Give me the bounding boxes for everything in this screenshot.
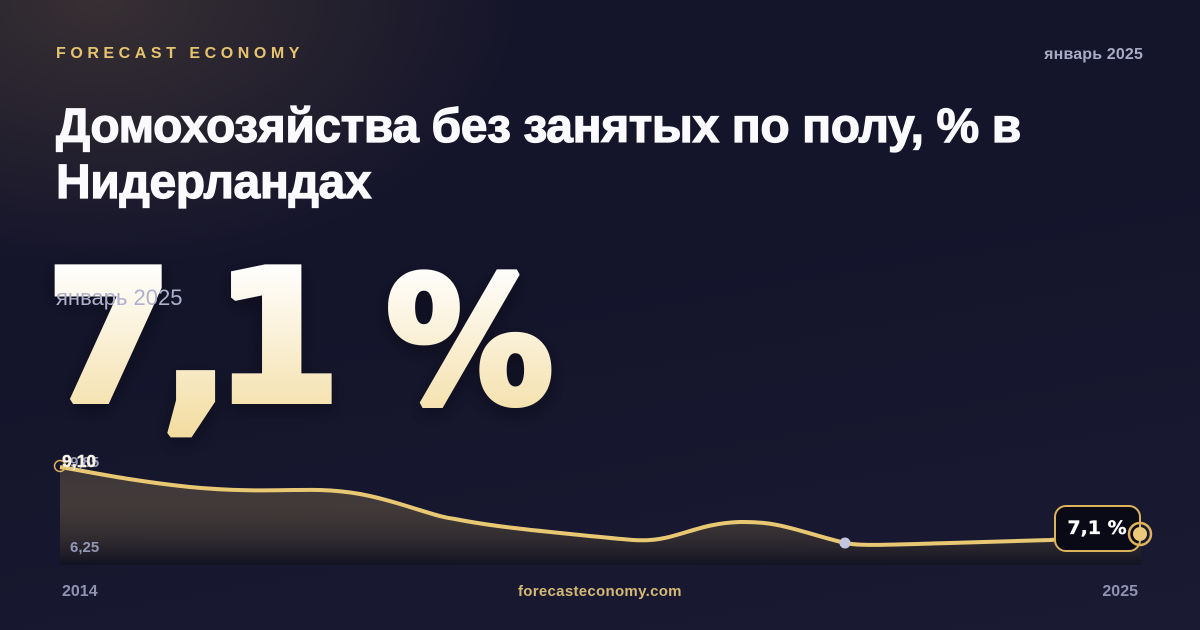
big value: , bbox=[161, 239, 230, 451]
date under value: январь 2025 bbox=[56, 285, 182, 310]
end year: 2025 bbox=[1102, 583, 1138, 600]
big value: 7 bbox=[46, 232, 173, 444]
big value bbox=[54, 242, 553, 444]
max label shadow: 9,85 bbox=[70, 454, 99, 471]
start year: 2014 bbox=[62, 583, 98, 600]
source: forecasteconomy.com bbox=[518, 583, 682, 600]
mid marker bbox=[840, 538, 850, 548]
title bbox=[56, 100, 1021, 209]
end marker bbox=[1129, 523, 1151, 545]
big value: % bbox=[386, 242, 553, 444]
data line bbox=[60, 467, 1141, 545]
start marker bbox=[54, 460, 66, 472]
title: Домохозяйства без занятых по полу, % в bbox=[56, 100, 1021, 153]
line chart bbox=[54, 451, 1152, 565]
max label: 9,10 bbox=[62, 451, 96, 471]
value callout bbox=[1055, 506, 1140, 551]
date top right: январь 2025 bbox=[1044, 46, 1143, 63]
brand label: FORECAST ECONOMY bbox=[56, 45, 304, 62]
min label: 6,25 bbox=[70, 539, 99, 556]
title: Нидерландах bbox=[56, 156, 371, 208]
big value: 1 bbox=[214, 232, 341, 444]
value callout: 7,1 % bbox=[1067, 517, 1127, 539]
area under line bbox=[60, 467, 1141, 565]
